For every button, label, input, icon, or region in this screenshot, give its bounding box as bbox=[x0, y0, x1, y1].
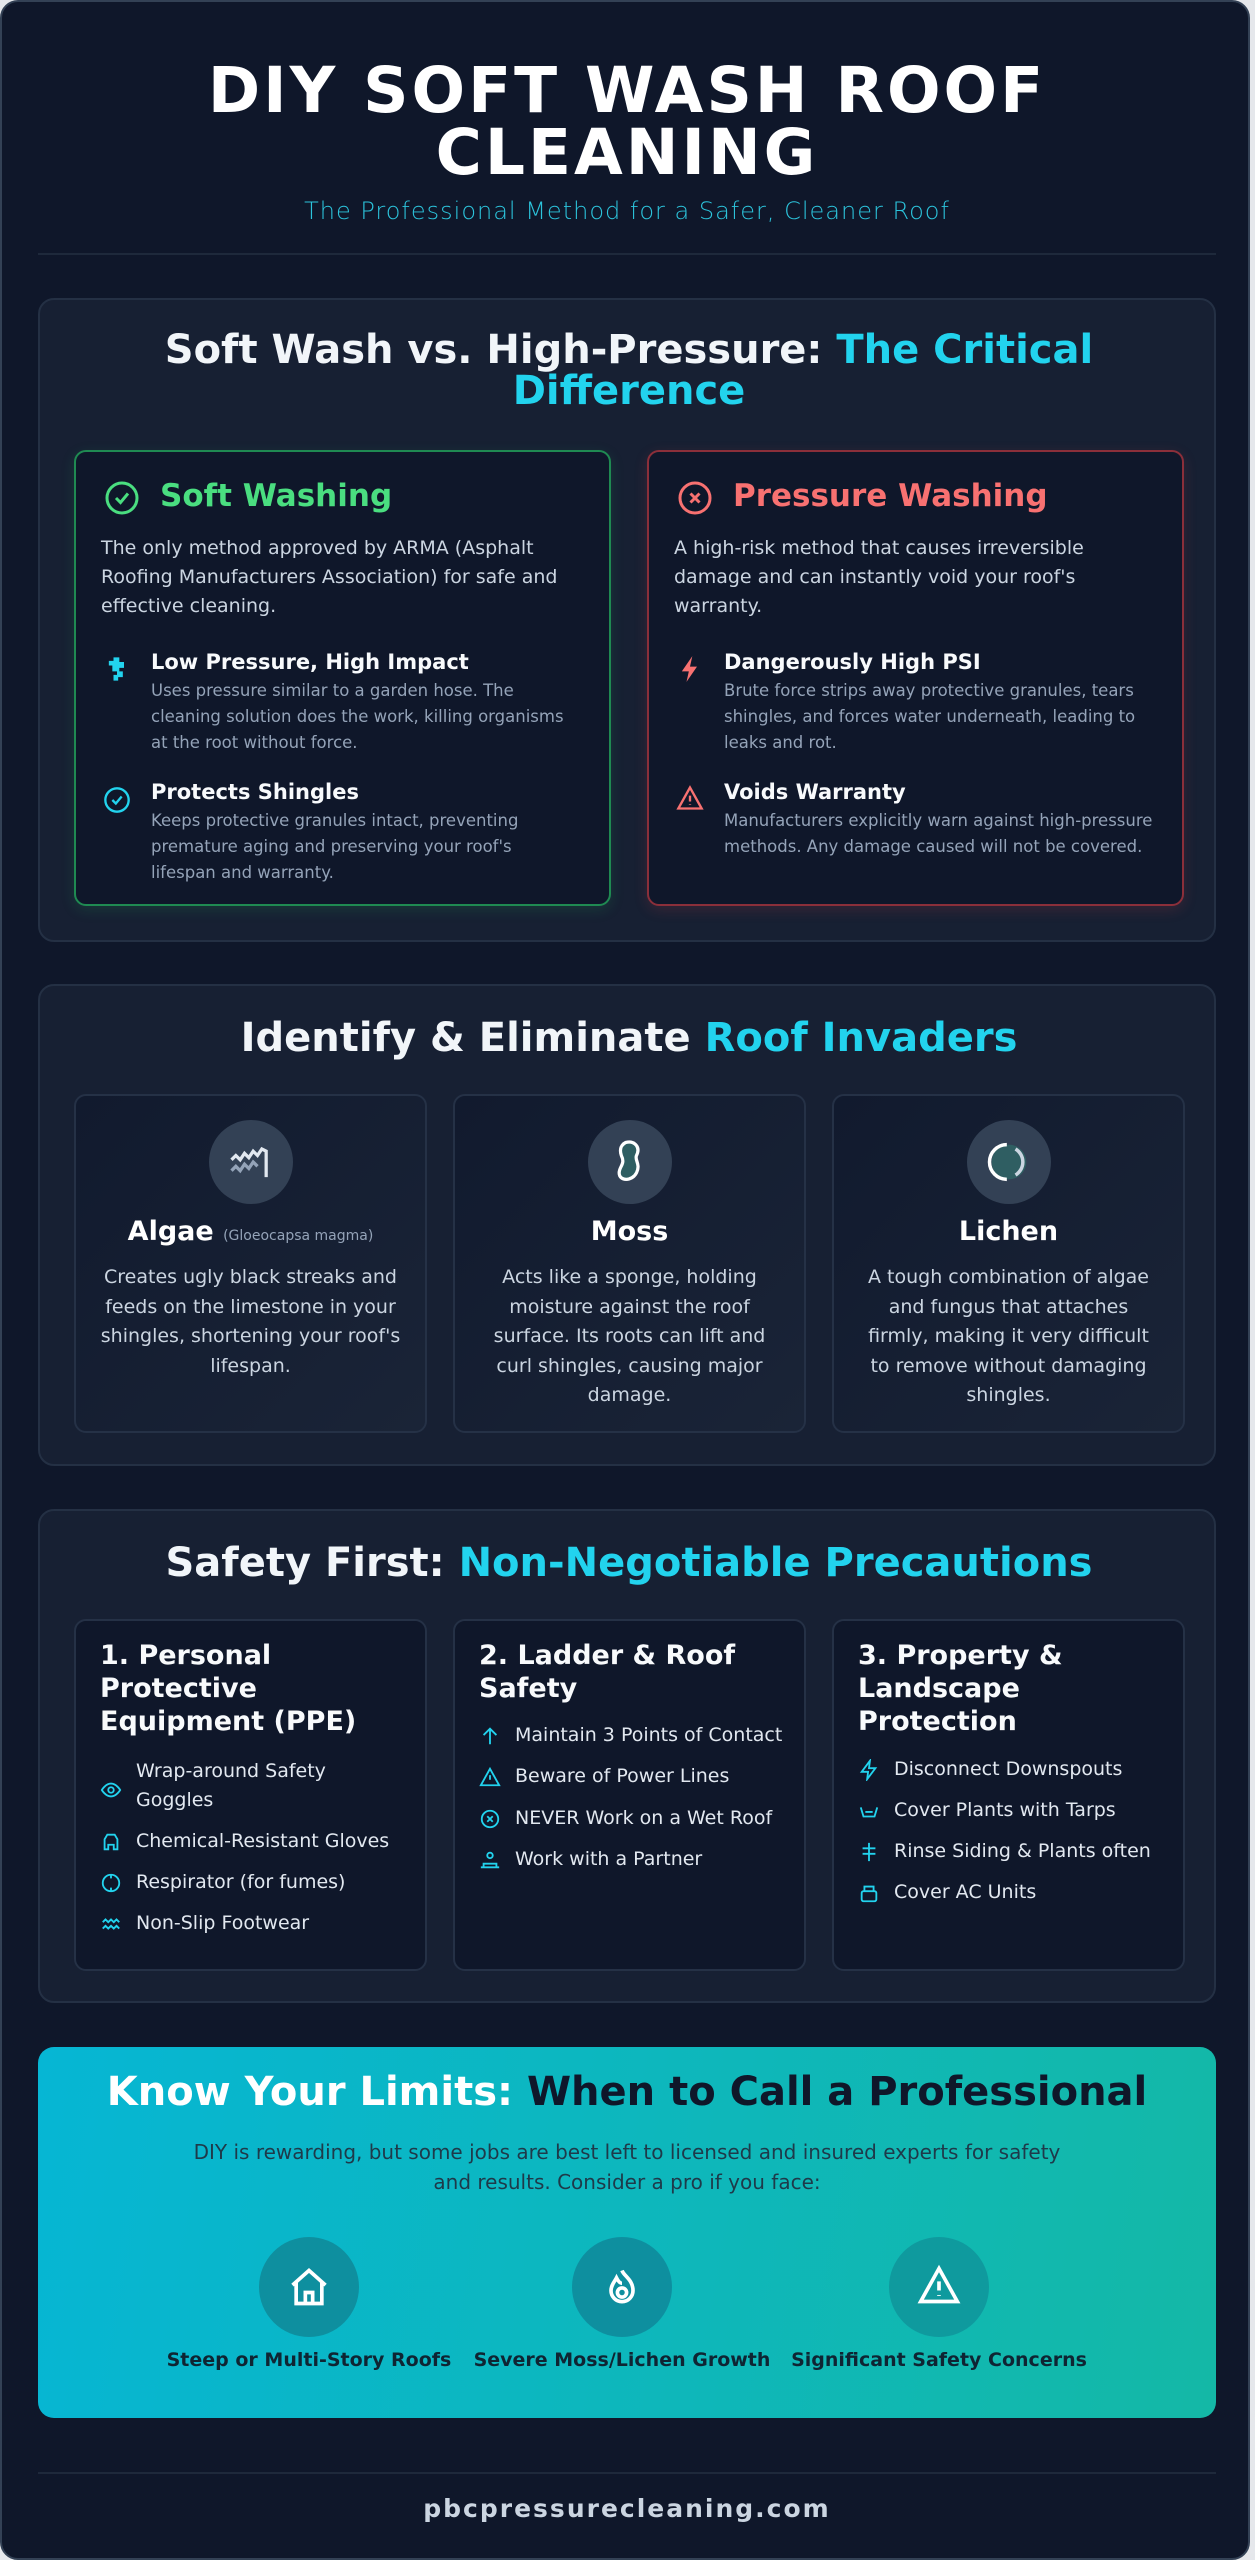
list item: Non-Slip Footwear bbox=[136, 1912, 309, 1934]
icon: algae bbox=[208, 1120, 292, 1204]
card: PPE: 1. Personal Protective Equipment (PPE) bbox=[100, 1640, 356, 1737]
description: A high-risk method that causes irreversible damage and can instantly void your roof's warranty. bbox=[674, 537, 1084, 617]
card: moss bbox=[453, 1094, 806, 1433]
card title: Moss bbox=[591, 1216, 668, 1247]
list item: Work with a Partner bbox=[515, 1848, 702, 1870]
card title: Pressure Washing bbox=[733, 478, 1048, 514]
title bbox=[208, 54, 1046, 189]
card title: Soft Washing bbox=[160, 478, 392, 514]
card: pressure washing bbox=[647, 450, 1184, 906]
heading: Soft Wash vs. High-Pressure: The Critical bbox=[165, 327, 1093, 373]
panel: safety first bbox=[38, 1509, 1216, 2003]
heading: Identify & Eliminate Roof Invaders bbox=[241, 1015, 1017, 1061]
icon: check circle bbox=[106, 482, 138, 514]
list item: NEVER Work on a Wet Roof bbox=[515, 1807, 772, 1829]
item: high psi bbox=[682, 650, 1135, 752]
item: high psi: Brute force strips away protective granules, tears shingles, and forces water underneath, leading to leaks and rot. bbox=[724, 681, 1135, 752]
list item: Cover AC Units bbox=[894, 1881, 1036, 1903]
item: low pressure: Uses pressure similar to a garden hose. The cleaning solution does the work, killing organisms at the root without force. bbox=[151, 681, 564, 752]
list item: Rinse Siding & Plants often bbox=[894, 1840, 1151, 1862]
description: The only method approved by ARMA (Asphalt Roofing Manufacturers Association) for safe and effective cleaning. bbox=[101, 537, 557, 617]
card: ladder bbox=[453, 1619, 806, 1971]
description: Acts like a sponge, holding moisture against the roof surface. Its roots can lift and curl shingles, causing major damage. bbox=[494, 1266, 765, 1406]
list item: Maintain 3 Points of Contact bbox=[515, 1724, 782, 1746]
item: high psi: Dangerously High PSI bbox=[724, 650, 981, 674]
item: voids warranty bbox=[676, 780, 1152, 856]
item: protects shingles: Keeps protective granules intact, preventing premature aging and preserving your roof's lifespan and warranty. bbox=[151, 811, 518, 882]
list item: Cover Plants with Tarps bbox=[894, 1799, 1116, 1821]
heading bbox=[165, 327, 1093, 414]
panel: soft wash vs pressure bbox=[38, 298, 1216, 942]
card: algae bbox=[74, 1094, 427, 1433]
title: DIY SOFT WASH ROOF bbox=[208, 54, 1046, 127]
card: lichen bbox=[832, 1094, 1185, 1433]
heading: Know Your Limits: When to Call a Professional bbox=[107, 2069, 1147, 2115]
footer: pbcpressurecleaning.com bbox=[423, 2494, 831, 2523]
item: severe growth: Severe Moss/Lichen Growth bbox=[474, 2349, 770, 2371]
description: A tough combination of algae and fungus that attaches firmly, making it very difficult to remove without damaging shingles. bbox=[868, 1266, 1149, 1406]
subtitle: The Professional Method for a Safer, Cleaner Roof bbox=[304, 197, 950, 225]
icon: moss bbox=[588, 1120, 672, 1204]
list item: Chemical-Resistant Gloves bbox=[136, 1830, 389, 1852]
card: property: 3. Property & Landscape Protection bbox=[858, 1640, 1063, 1737]
item: safety concerns bbox=[791, 2237, 1087, 2371]
item: severe growth bbox=[474, 2237, 770, 2371]
item: safety concerns: Significant Safety Concerns bbox=[791, 2349, 1087, 2371]
heading: Difference bbox=[513, 368, 745, 414]
list item: Wrap-around Safety Goggles bbox=[136, 1760, 326, 1811]
item: protects shingles: Protects Shingles bbox=[151, 780, 359, 804]
item: voids warranty: Voids Warranty bbox=[724, 780, 906, 804]
list item: Respirator (for fumes) bbox=[136, 1871, 345, 1893]
card title: Lichen bbox=[959, 1216, 1058, 1247]
list item: Disconnect Downspouts bbox=[894, 1758, 1122, 1780]
card: property bbox=[832, 1619, 1185, 1971]
card: soft washing bbox=[74, 450, 611, 906]
description: Creates ugly black streaks and feeds on the limestone in your shingles, shortening your roof's lifespan. bbox=[101, 1266, 400, 1376]
panel: know your limits bbox=[38, 2047, 1216, 2418]
card: ladder: 2. Ladder & Roof Safety bbox=[479, 1640, 735, 1704]
panel: roof invaders bbox=[38, 984, 1216, 1466]
item: low pressure bbox=[108, 650, 564, 752]
item: steep roofs bbox=[167, 2237, 451, 2371]
icon: lichen bbox=[966, 1120, 1050, 1204]
item: steep roofs: Steep or Multi-Story Roofs bbox=[167, 2349, 451, 2371]
title: CLEANING bbox=[436, 116, 818, 189]
heading: Safety First: Non-Negotiable Precautions bbox=[165, 1540, 1092, 1586]
card: PPE bbox=[74, 1619, 427, 1971]
card title: Algae (Gloeocapsa magma) bbox=[128, 1216, 373, 1247]
item: low pressure: Low Pressure, High Impact bbox=[151, 650, 469, 674]
item: protects shingles bbox=[104, 780, 518, 882]
paragraph: DIY is rewarding, but some jobs are best left to licensed and insured experts for safety and results. Consider a pro if you face: bbox=[194, 2140, 1060, 2194]
icon: x circle bbox=[678, 482, 712, 514]
item: voids warranty: Manufacturers explicitly warn against high-pressure methods. Any damage caused will not be covered. bbox=[724, 811, 1152, 856]
list item: Beware of Power Lines bbox=[515, 1765, 729, 1787]
